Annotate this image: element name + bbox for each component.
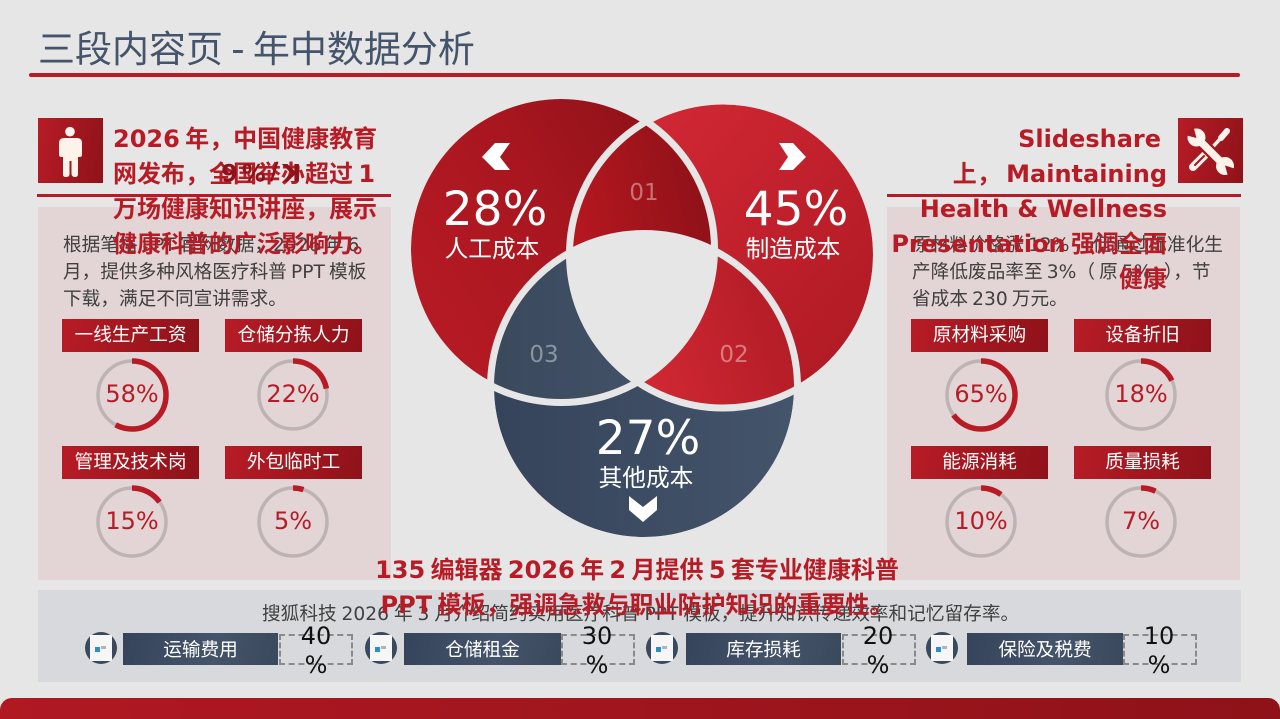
title: 三段内容页 - 年中数据分析: [38, 28, 475, 71]
tag: 设备折旧: [1074, 318, 1211, 352]
right heading: [891, 125, 1167, 293]
label: 仓储租金: [404, 633, 561, 665]
left heading: 健康科普的广泛影响力。: [113, 230, 377, 258]
label 01: 01: [629, 180, 659, 206]
ring: 15%: [96, 485, 168, 558]
value box 2: [561, 634, 635, 665]
ring: 5%: 5%: [274, 507, 312, 535]
ring: 65%: [945, 358, 1018, 432]
value 45%: 45%: [744, 182, 848, 237]
circle: 制造成本: [573, 104, 873, 404]
right heading: 上， Maintaining: [953, 160, 1167, 188]
value: 30%: 30: [582, 622, 612, 650]
icon: item 2: [365, 632, 397, 664]
label: 运输费用: 运输费用: [163, 640, 238, 661]
value: 10%: 10: [1144, 622, 1174, 650]
chevron right: [779, 143, 806, 170]
right paragraph: [912, 235, 1223, 310]
ring: 18%: [1105, 358, 1177, 431]
circle separators: [408, 96, 876, 540]
icon: wrench and screwdriver: [1178, 118, 1243, 183]
footer bar: [0, 698, 1280, 719]
value: 10%: [1144, 622, 1174, 679]
ring: 5%: [257, 485, 329, 558]
bottom paragraph: 搜狐科技 2026 年 3 月介绍简约实用医疗科普 PPT 模板，提升知识传递效率和记忆留存率。: [262, 604, 1019, 625]
ring: 65%: 65%: [954, 380, 1008, 408]
tag: 一线生产工资: [62, 318, 199, 352]
circle: 其他成本: [494, 237, 794, 537]
value: 20%: 20: [863, 622, 893, 650]
label: 运输费用: [123, 633, 278, 665]
tag: 仓储分拣人力: [225, 318, 362, 352]
ring: 22%: 22%: [266, 380, 320, 408]
overlap 02: [644, 256, 794, 404]
left paragraph: [63, 234, 366, 310]
chevron down: [629, 496, 657, 522]
label: 保险及税费: 保险及税费: [998, 640, 1092, 661]
chevron left: [482, 143, 510, 170]
right heading rule: [887, 194, 1241, 196]
value 28%: 28%: [443, 182, 547, 237]
venn chart: [411, 99, 873, 537]
ring: 22%: [257, 358, 329, 431]
label 人工成本: 人工成本: [445, 235, 539, 263]
tag: 原材料采购: 原材料采购: [933, 324, 1026, 346]
value box 3: [842, 634, 916, 665]
value box 4: [1123, 634, 1197, 665]
ring: 10%: [945, 485, 1017, 558]
value: 20%: %: [867, 651, 889, 679]
right heading: 健康: [1119, 265, 1167, 293]
ring: 15%: 15%: [105, 507, 159, 535]
tag: 管理及技术岗: [62, 446, 199, 479]
circle: 人工成本: [411, 99, 711, 399]
value: 30%: [582, 622, 612, 679]
label 03: 03: [529, 342, 559, 368]
value box 1: [279, 634, 353, 665]
value: 30%: %: [586, 651, 608, 679]
overlap 01: [574, 126, 711, 246]
left heading: 网发布，全国举办超过 1: [113, 160, 375, 188]
left heading rule: [37, 194, 391, 196]
left paragraph: 根据笔格 PPT 官网数据，2026 年 6: [63, 235, 359, 256]
panel: left background: [38, 207, 391, 580]
tag: 一线生产工资: 一线生产工资: [75, 324, 186, 346]
label 02: 02: [719, 342, 749, 368]
value: 10%: %: [1148, 651, 1170, 679]
left paragraph: 下载，满足不同宣讲需求。: [63, 289, 287, 310]
tag: 质量损耗: [1074, 446, 1211, 479]
panel: right background: [887, 207, 1240, 580]
bottom heading: PPT 模板，强调急救与职业防护知识的重要性。: [381, 591, 893, 619]
right heading: Health & Wellness: [920, 195, 1167, 223]
icon: item 1: [85, 632, 117, 664]
tag: 设备折旧: 设备折旧: [1105, 324, 1180, 346]
label 制造成本: 制造成本: [746, 235, 840, 263]
tag: 原材料采购: [911, 318, 1048, 352]
title underline: [29, 73, 1240, 77]
label: 库存损耗: [686, 633, 841, 665]
overlapped rotated percent label: K/%6: [217, 158, 301, 186]
right paragraph: 产降低废品率至 3%（ 原 5% ），节: [912, 262, 1211, 283]
ring: 7%: 7%: [1122, 507, 1160, 535]
left heading: [113, 125, 377, 258]
tag: 仓储分拣人力: 仓储分拣人力: [238, 324, 349, 346]
icon: person: [38, 118, 103, 183]
label: 仓储租金: 仓储租金: [445, 640, 520, 661]
right paragraph: 省成本 230 万元。: [912, 289, 1068, 310]
label 其他成本: 其他成本: [599, 464, 693, 492]
label: 保险及税费: [967, 633, 1123, 665]
tag: 能源消耗: 能源消耗: [942, 452, 1017, 473]
bottom heading: [375, 556, 899, 619]
value: 40%: %: [305, 651, 327, 679]
bottom heading: 135 编辑器 2026 年 2 月提供 5 套专业健康科普: [375, 556, 899, 584]
icon: item 3: [646, 632, 678, 664]
value: 40%: [301, 622, 331, 679]
panel: bottom background: [38, 590, 1241, 682]
label: 库存损耗: 库存损耗: [726, 640, 801, 661]
ring: 7%: [1105, 485, 1177, 558]
tag: 外包临时工: 外包临时工: [247, 452, 340, 473]
left heading: 万场健康知识讲座，展示: [113, 195, 377, 223]
centre hole: [573, 237, 711, 378]
left paragraph: 月，提供多种风格医疗科普 PPT 模板: [63, 262, 366, 283]
right heading: Slideshare: [1018, 125, 1161, 153]
icon: item 4: [926, 632, 958, 664]
right paragraph: 原材料价格涨 12% ，但通过标准化生: [912, 235, 1223, 256]
ring: 18%: 18%: [1114, 380, 1168, 408]
tag: 管理及技术岗: 管理及技术岗: [75, 452, 186, 473]
ring: 10%: 10%: [954, 507, 1008, 535]
tag: 质量损耗: 质量损耗: [1105, 452, 1180, 473]
value: 40%: 40: [301, 622, 331, 650]
tag: 外包临时工: [225, 446, 362, 479]
right heading: Presentation 强调全面: [891, 230, 1167, 258]
value 27%: 27%: [596, 411, 700, 466]
ring: 58%: 58%: [105, 380, 159, 408]
overlap 03: [494, 259, 566, 382]
ring: 58%: [96, 358, 169, 432]
left heading: 2026 年，中国健康教育: [113, 125, 377, 153]
tag: 能源消耗: [911, 446, 1048, 479]
value: 20%: [863, 622, 893, 679]
